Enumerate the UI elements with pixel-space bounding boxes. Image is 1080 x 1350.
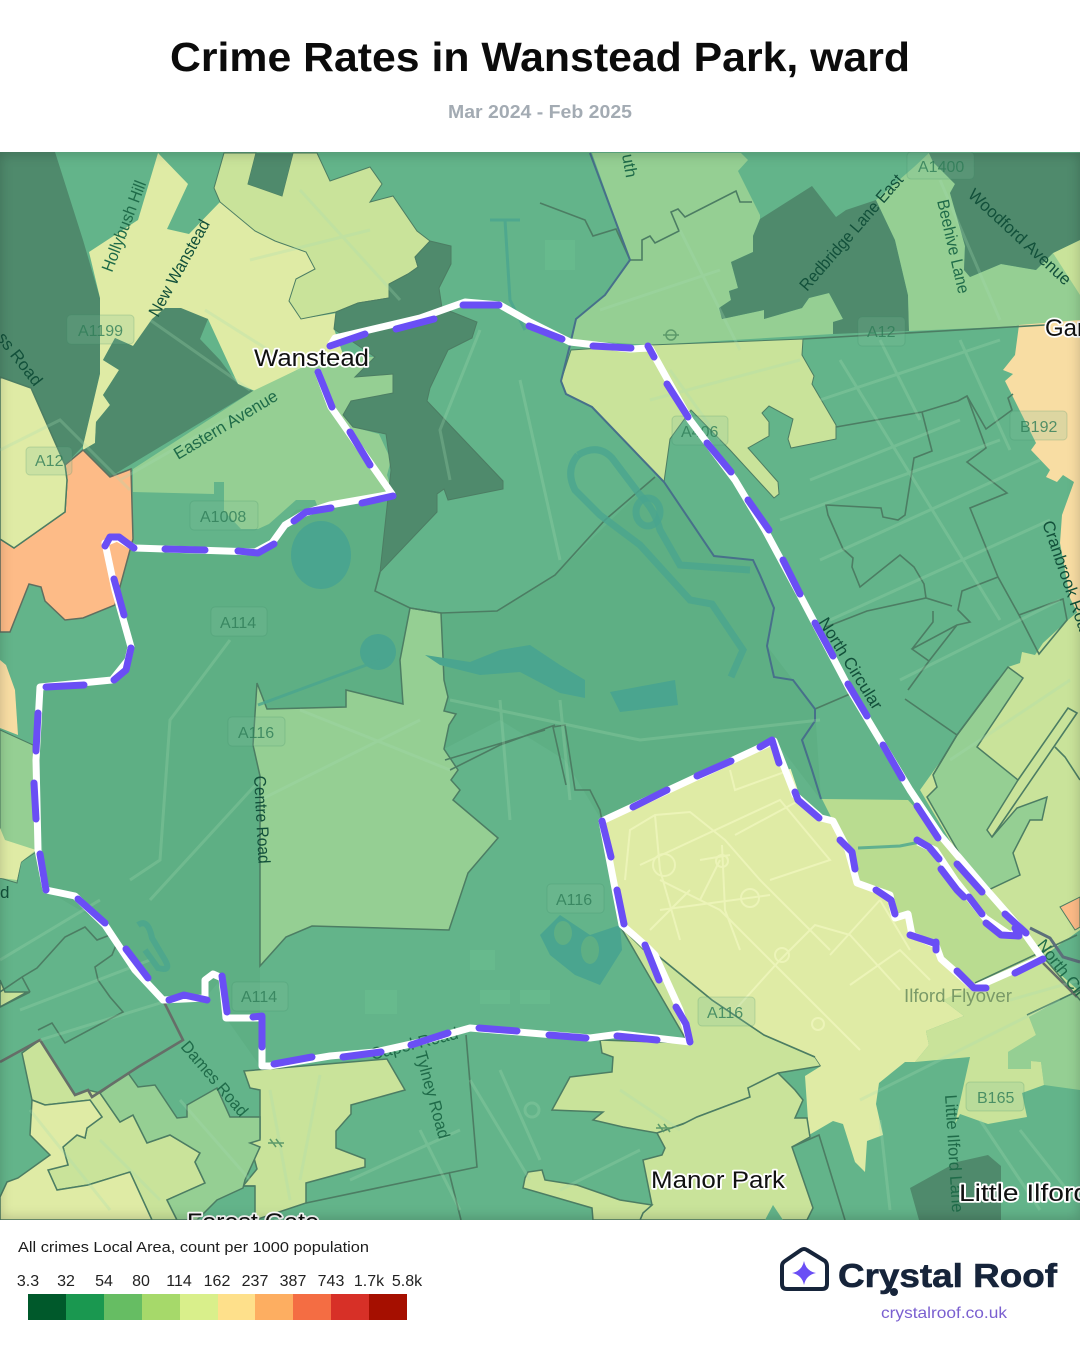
area: light green north-east of river (571, 153, 843, 345)
road shields: A12 (35, 453, 64, 470)
legend scale labels: 162 (204, 1273, 230, 1290)
street labels: Eastern Avenue (170, 386, 281, 463)
subtitle: date range: Mar 2024 - Feb 2025 (448, 102, 632, 122)
title: Crime Rates in Wanstead Park, ward (170, 34, 910, 80)
rail symbols (268, 330, 679, 1147)
area: pale cemetery (602, 739, 974, 1172)
brand name: Crystal Roof (838, 1257, 1058, 1294)
legend scale labels: 32 (57, 1273, 75, 1290)
place labels: Little Ilford (959, 1180, 1080, 1207)
road shields: B165 (977, 1090, 1014, 1107)
street labels: Hollybush Hill (98, 178, 150, 274)
legend colour bar (28, 1294, 407, 1320)
road shields: A1400 (918, 159, 964, 176)
street labels: Centre Road (250, 775, 274, 864)
street labels: Dames Road (177, 1037, 252, 1120)
area: yellow-green Forest Gate (243, 1059, 405, 1220)
area: light green SW (100, 1073, 260, 1220)
legend scale labels: 237 (242, 1273, 268, 1290)
road shields: A1199 (78, 323, 123, 340)
area: dark block south-east (910, 1155, 1001, 1220)
area: yellow-green beside cemetery (822, 799, 1040, 988)
street labels (0, 152, 1080, 1213)
ward boundary: inner loop casing (918, 842, 1020, 935)
logo: Crystal Roof (782, 1249, 1058, 1322)
area: central light green (253, 608, 498, 966)
place labels: Forest Gate (187, 1209, 319, 1236)
area: yellow-green lower band (552, 926, 821, 1133)
ward boundary: purple dashes (34, 305, 1043, 1064)
place labels: Manor Park (651, 1167, 786, 1194)
area: dark Redbridge block (719, 186, 909, 334)
website: crystalroof.co.uk (881, 1305, 1008, 1322)
area: dark polygon by Eastern Avenue (83, 308, 253, 477)
area: dark Woodford block (929, 153, 1080, 277)
street labels: Beehive Lane (933, 198, 973, 295)
building footprints (365, 240, 575, 1014)
road shields: A12 (867, 324, 896, 341)
road shields: A116 (707, 1005, 743, 1022)
area: sand east (1003, 320, 1080, 618)
legend title: All crimes Local Area, count per 1000 population (18, 1239, 369, 1256)
cemetery paths (625, 770, 930, 1050)
river channels (138, 220, 920, 969)
road shields: A114 (220, 615, 256, 632)
area: yellow-green small west (0, 980, 27, 1007)
pond islands (554, 921, 599, 964)
street labels: Capel Road (368, 1024, 460, 1064)
area: yellow-green Manor Park (640, 1073, 813, 1220)
legend scale labels: 5.8k (392, 1273, 423, 1290)
area: yellow-green SW block (22, 1040, 205, 1220)
legend scale labels: 114 (166, 1273, 192, 1290)
icon: house with star (782, 1249, 827, 1289)
area: yellow-green top right corner (1053, 240, 1080, 295)
area: dark forest Wanstead Flats (334, 241, 503, 572)
area: orange high-crime (0, 450, 133, 632)
area: park centre (441, 477, 821, 821)
area: Beehive Lane light green (876, 153, 1080, 331)
place labels: Wanstead (254, 345, 369, 372)
area: yellow-green strip south (523, 1170, 652, 1220)
area: pale north-west strip (83, 153, 344, 450)
area: base green triangle south (765, 1205, 783, 1220)
street labels: uth (618, 152, 641, 179)
street labels: Woodford Avenue (964, 185, 1075, 289)
legend scale labels (17, 1273, 423, 1290)
road network (0, 180, 1080, 1210)
street labels: North Circular (815, 614, 886, 713)
road shields: B192 (1020, 419, 1057, 436)
area: orange small east (1060, 897, 1080, 930)
area: light green far south-east (1008, 990, 1080, 1090)
water: lakes and river (291, 521, 678, 985)
area: pale west edge (0, 828, 36, 880)
map vignette (0, 148, 1080, 1224)
street labels: Ilford Flyover (904, 986, 1012, 1006)
road shields: A1008 (200, 509, 246, 526)
road shields: A114 (241, 989, 277, 1006)
area: neighbourhood boundaries (0, 153, 1080, 1220)
street labels: d (0, 883, 9, 902)
legend scale labels: 80 (132, 1273, 150, 1290)
place labels (187, 315, 1080, 1236)
street labels: New Wanstead (145, 216, 214, 320)
area: Eastern Avenue light green (133, 357, 393, 529)
area: pale west (0, 377, 67, 548)
area: yellow-green south of A12 (561, 339, 836, 498)
legend scale labels: 54 (95, 1273, 113, 1290)
street labels: Redbridge Lane East (796, 170, 907, 295)
ward boundary: white casing (36, 302, 1042, 1066)
strip edges east (992, 708, 1080, 837)
area: low-crime far west block (0, 152, 100, 465)
area: light green west edge (0, 730, 36, 883)
area: forest west (36, 495, 410, 1066)
logo descender dot (890, 1288, 898, 1296)
street labels: Tylney Road (411, 1049, 454, 1141)
road shields: A116 (238, 725, 274, 742)
road shields: A406 (681, 424, 718, 441)
legend (17, 1239, 423, 1320)
area: light green east (927, 667, 1047, 893)
area: pale SW (0, 1100, 152, 1220)
legend scale labels: 3.3 (17, 1273, 39, 1290)
area: yellow-green Ilford band (915, 958, 1078, 1124)
area: yellow-green north block (214, 153, 430, 319)
legend scale labels: 1.7k (354, 1273, 385, 1290)
road shields: A116 (556, 892, 592, 909)
area: sand west edge (0, 660, 18, 735)
street labels: Little Ilford Lane (941, 1094, 967, 1213)
legend scale labels: 743 (318, 1273, 344, 1290)
road shields (26, 152, 1067, 1111)
area: dark block north (248, 153, 293, 196)
area: yellow-green east (920, 610, 1080, 955)
legend scale labels: 387 (280, 1273, 306, 1290)
